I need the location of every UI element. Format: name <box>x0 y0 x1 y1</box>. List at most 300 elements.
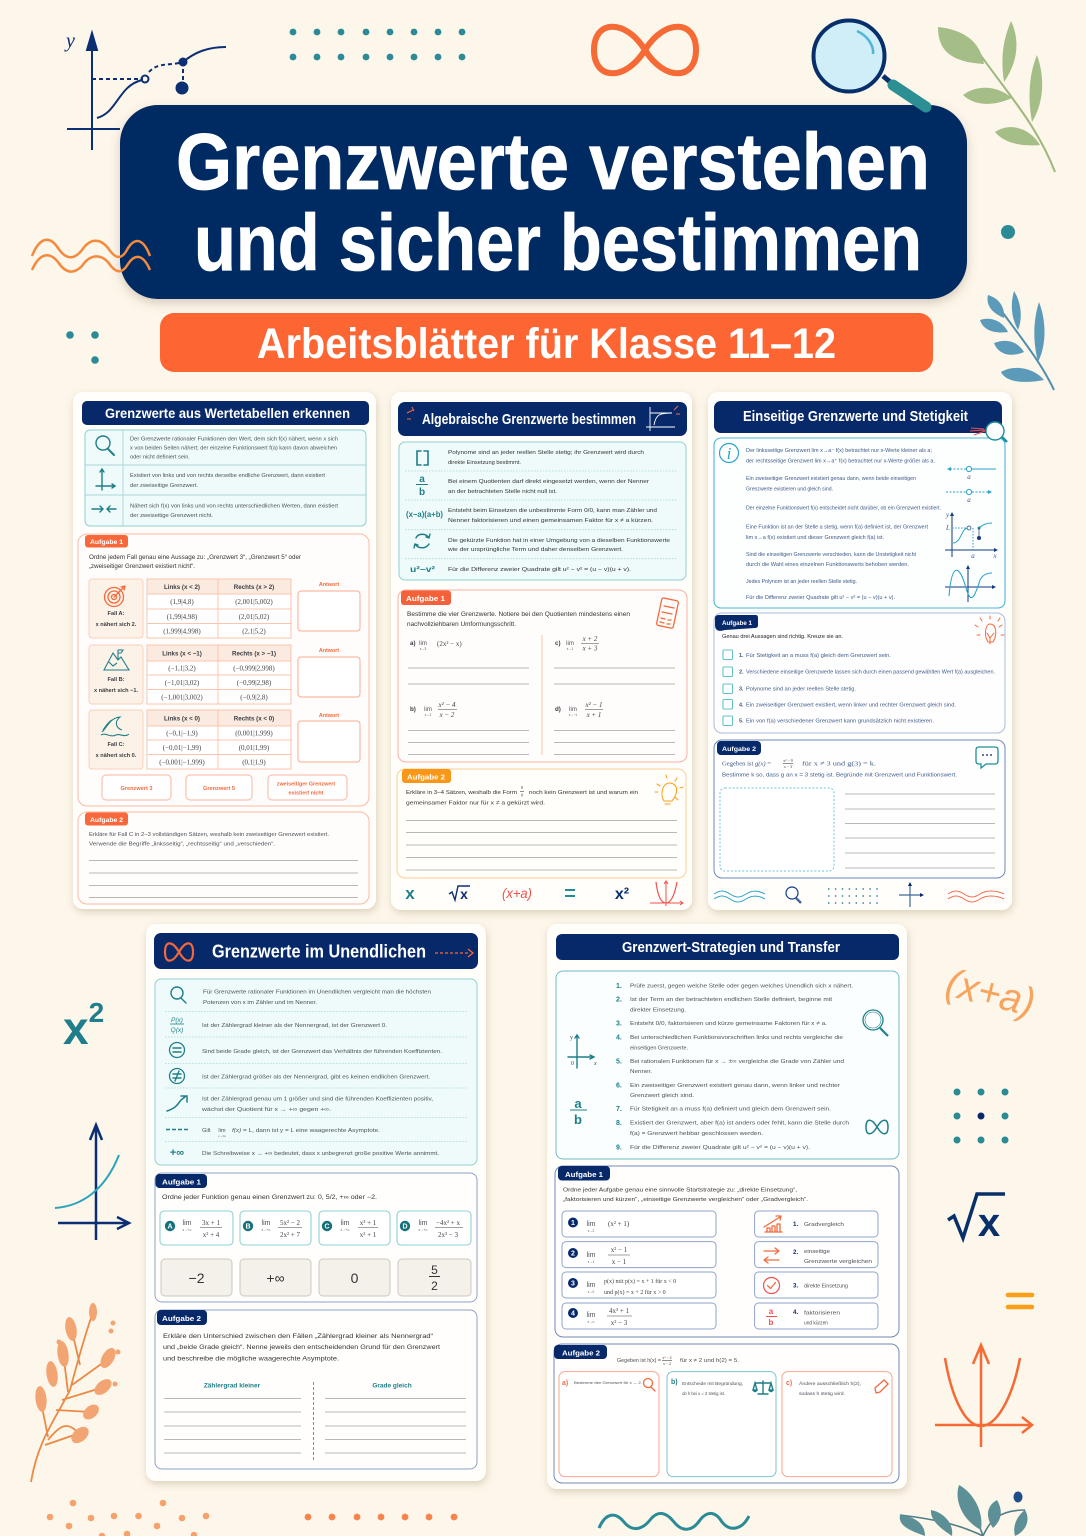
worksheet 5 heading <box>556 934 899 960</box>
function A: A <box>167 1224 173 1230</box>
worksheet 2 info box: Entsteht beim Einsetzen die unbestimmte Form 0/0, kann man Zähler und <box>448 508 657 514</box>
worksheet 1 Aufgabe 2: Verwende die Begriffe „linksseitig“, „rechtsseitig“ und „verschieden“. <box>89 842 275 848</box>
worksheet 4 heading <box>154 933 478 969</box>
case A <box>89 579 143 638</box>
item 4: 4 <box>571 1310 575 1318</box>
function D: D <box>402 1224 408 1230</box>
worksheet 3 Aufgabe 2: Gegeben ist g(x) = <box>722 760 771 768</box>
case C: Fall C: <box>107 742 125 748</box>
strategy: direkte Einsetzung: direkte Einsetzung <box>804 1284 848 1290</box>
checkbox list: 1. <box>739 653 744 659</box>
worksheet 4 info box: Ist der Zählergrad kleiner als der Nennergrad, ist der Grenzwert 0. <box>202 1023 387 1029</box>
worksheet 1 info box: x von beiden Seiten nähert; der einzelne Funktionswert f(a) kann davon abweichen <box>130 446 337 452</box>
case B <box>89 645 143 704</box>
worksheet 3 Aufgabe 1: Aufgabe 1 <box>722 621 753 627</box>
worksheet 2 info box: direkte Einsetzung bestimmt. <box>448 460 521 466</box>
table B: Rechts (x > −1) <box>232 650 276 658</box>
worksheet 5 Aufgabe 2: x − 2 <box>663 1362 671 1366</box>
worksheet 5 heading: Grenzwert-Strategien und Transfer <box>622 940 840 956</box>
decoration: orange dot row <box>305 1514 457 1520</box>
icon: fraction: a <box>419 474 425 485</box>
worksheet 4 info box: Sind beide Grade gleich, ist der Grenzwert das Verhältnis der führenden Koeffizienten. <box>202 1049 442 1055</box>
worksheet 4: Grenzwerte im Unendlichen <box>146 924 486 1481</box>
function B: lim <box>262 1220 271 1227</box>
worksheet 5 strategy list: Existiert der Grenzwert, aber f(a) ist anders oder fehlt, kann die Stelle durch <box>630 1120 849 1126</box>
icon: axes <box>96 469 115 490</box>
worksheet 3 Aufgabe 2: x − 3 <box>784 764 792 769</box>
strategy: Gradvergleich: 1. <box>793 1221 798 1228</box>
item 4: 4x³ + 1 <box>609 1307 630 1315</box>
worksheet 1 Aufgabe 1: Ordne jedem Fall genau eine Aussage zu: „Grenzwert 3“, „Grenzwert 5“ oder <box>89 555 301 561</box>
function C <box>319 1211 390 1245</box>
worksheet 1 info box <box>85 430 366 526</box>
icon: arrows toward each other <box>92 506 116 512</box>
table A: (2,001|5,002) <box>235 598 273 606</box>
worksheet 1: Wertetabellen <box>73 392 376 909</box>
worksheet 3 info box: Der einzelne Funktionswert f(x) entscheidet nicht darüber, ob ein Grenzwert existiert. <box>746 506 941 512</box>
answer box B <box>298 648 360 697</box>
problem c: x + 3 <box>582 644 598 652</box>
worksheet 3 info box: Jedes Polynom ist an jeder reellen Stelle stetig. <box>746 579 857 585</box>
icon: magnifier <box>171 987 186 1003</box>
function A <box>160 1211 233 1245</box>
diagram: jump graph <box>945 511 998 560</box>
checkbox list: Für Stetigkeit an a muss f(a) gleich dem Grenzwert sein. <box>746 653 891 659</box>
strategy: faktorisieren: b <box>769 1318 774 1327</box>
worksheet 4 info box: Potenzen von x im Zähler und im Nenner. <box>203 1000 317 1006</box>
item 4: x→∞ <box>587 1320 595 1324</box>
answer: -2 <box>161 1259 232 1296</box>
worksheet 4 Aufgabe 1: Ordne jeder Funktion genau einen Grenzwert zu: 0, 5/2, +∞ oder −2. <box>162 1195 377 1201</box>
function B <box>240 1211 311 1245</box>
icon: fraction: b <box>574 1112 582 1127</box>
worksheet 4 info box: lim <box>218 1128 226 1134</box>
item 2 <box>562 1242 716 1268</box>
strategy: faktorisieren: 4. <box>793 1309 798 1316</box>
subtask b: ob h bei x = 2 stetig ist. <box>682 1391 725 1396</box>
icon: axes <box>568 1035 597 1068</box>
subtask b: Entscheide mit Begründung, <box>682 1381 743 1386</box>
worksheet 2 info box: Für die Differenz zweier Quadrate gilt u² − v² = (u − v)(u + v). <box>448 567 631 573</box>
table C: Links (x < 0) <box>164 716 200 722</box>
problem b: x² − 4 <box>438 701 456 709</box>
worksheet 5 strategy list: Nenner. <box>630 1069 652 1075</box>
subtask c <box>782 1372 892 1477</box>
table A: (2,1|5,2) <box>242 628 266 636</box>
worksheet 3 info box: durch die Wahl eines einzelnen Funktionswerts behoben werden. <box>746 562 909 568</box>
checkbox list: Ein zweiseitiger Grenzwert existiert, wenn linker und rechter Grenzwert gleich sind. <box>746 702 956 708</box>
worksheet 5 strategy list: Entsteht 0/0, faktorisieren und kürze gemeinsame Faktoren für x ≠ a. <box>630 1021 828 1027</box>
worksheet 5 strategy list: einseitigen Grenzwerte. <box>630 1046 688 1052</box>
worksheet 3: Einseitige Grenzwerte <box>708 392 1012 910</box>
strategy: einseitige Grenzwerte: 2. <box>793 1249 798 1256</box>
checkbox list: Ein von f(a) verschiedener Grenzwert kann grundsätzlich nicht existieren. <box>746 718 934 724</box>
icon: orange parabola <box>935 1345 1032 1447</box>
decoration: teal dot right of banner <box>1001 225 1015 239</box>
worksheet 5 strategy list: 8. <box>616 1120 622 1127</box>
worksheet 5 strategy list: Für Stetigkeit an a muss f(a) definiert und gleich dem Grenzwert sein. <box>630 1106 832 1112</box>
strategy: einseitige Grenzwerte: Grenzwerte vergleichen <box>804 1259 872 1265</box>
problem c: c) <box>555 640 561 647</box>
item 2: x − 1 <box>612 1258 627 1266</box>
icon: limit graph top left <box>64 30 226 150</box>
worksheet 4 Aufgabe 2: Grade gleich <box>372 1382 412 1390</box>
worksheet 3 info box: Grenzwerte existieren und gleich sind. <box>746 486 833 492</box>
item 3: x→0 <box>588 1290 594 1294</box>
worksheet 2 info box: Nenner faktorisieren und einen gemeinsamen Faktor für x ≠ a kürzen. <box>448 518 653 524</box>
item 2: lim <box>587 1252 596 1259</box>
icon: axes: y <box>570 1035 573 1041</box>
answer box A: Antwort <box>319 582 339 588</box>
diagram: left limit: a <box>967 473 971 481</box>
worksheet 5 Aufgabe 1: „faktorisieren und kürzen“, „einseitige Grenzwerte vergleichen“ oder „Gradvergleich“. <box>563 1197 809 1203</box>
item 3: 3 <box>571 1280 575 1288</box>
answer: 0 <box>319 1259 390 1296</box>
table C: (0,01|1,99) <box>239 744 270 752</box>
worksheet 5 Aufgabe 2: für x ≠ 2 und h(2) = 5. <box>680 1358 739 1364</box>
icon: fraction <box>416 474 428 498</box>
worksheet 2 Aufgabe 1 <box>398 590 687 762</box>
table C: Rechts (x < 0) <box>234 716 274 722</box>
function B: 2x² + 7 <box>280 1231 301 1239</box>
worksheet 3 Aufgabe 2 <box>714 740 1005 878</box>
decoration: orange waves <box>32 240 150 272</box>
item 1: x→2 <box>588 1229 594 1233</box>
answer: +inf <box>240 1259 311 1296</box>
case C: x nähert sich 0. <box>96 753 137 759</box>
problem b: x→2 <box>425 713 432 717</box>
worksheet 5 Aufgabe 2 <box>554 1344 899 1483</box>
problem a: lim <box>419 641 427 647</box>
function C: x³ + 1 <box>360 1219 377 1227</box>
icon: equal circle <box>170 1042 184 1058</box>
worksheet 2 Aufgabe 2: Aufgabe 2 <box>407 772 445 782</box>
function D: lim <box>419 1220 428 1227</box>
table A: Rechts (x > 2) <box>234 584 274 591</box>
worksheet 3 info box: lim x→a f(x) existiert und dieser Grenzwert gleich f(a) ist. <box>746 535 884 541</box>
icon: plus infinity: +∞ <box>170 1147 184 1159</box>
worksheet 5 strategy list: Bei rationalen Funktionen für x → ±∞ vergleiche die Grade von Zähler und <box>630 1059 844 1065</box>
worksheet 4 info box: Für Grenzwerte rationaler Funktionen im Unendlichen vergleicht man die höchsten <box>203 990 431 996</box>
problem d: x→−1 <box>569 713 577 717</box>
worksheet 4 info box: x→±∞ <box>218 1134 226 1138</box>
icon: squares: u²−v² <box>410 565 435 574</box>
worksheet 5 strategy list: Ein zweiseitiger Grenzwert existiert genau dann, wenn linker und rechter <box>630 1083 840 1089</box>
worksheet 2 math footer: x <box>405 884 415 903</box>
worksheet 2 info box: Die gekürzte Funktion hat in einer Umgebung von a dieselben Funktionswerte <box>448 538 670 544</box>
worksheet 1 Aufgabe 2: Aufgabe 2 <box>90 817 123 824</box>
item 2: x→1 <box>588 1260 594 1264</box>
problem c: lim <box>566 641 574 647</box>
function C: x² + 1 <box>360 1231 377 1239</box>
worksheet 4 Aufgabe 1 <box>155 1173 477 1302</box>
worksheet 2 Aufgabe 2: noch kein Grenzwert ist und warum ein <box>529 790 638 796</box>
icon: axes: x <box>593 1061 597 1067</box>
problem c: x + 2 <box>582 635 598 643</box>
icon: P over Q <box>170 1017 184 1034</box>
worksheet 2 info box: an der betrachteten Stelle nicht null ist. <box>448 489 557 495</box>
case A: x nähert sich 2. <box>96 622 137 628</box>
checkbox list: Polynome sind an jeder reellen Stelle stetig. <box>746 686 856 692</box>
worksheet 1 info box: Existiert von links und von rechts derselbe endliche Grenzwert, dann existiert <box>130 473 325 479</box>
item 1: 1 <box>571 1220 575 1227</box>
option: Grenzwert 5 <box>186 775 252 800</box>
option: kein Grenzwert: existiert nicht <box>288 790 324 796</box>
problem b: b) <box>410 706 416 713</box>
item 1: lim <box>587 1221 596 1228</box>
checkbox list <box>723 650 995 726</box>
function A: lim <box>183 1220 192 1227</box>
worksheet 4 Aufgabe 1: Aufgabe 1 <box>162 1178 201 1186</box>
answer box C <box>298 713 360 762</box>
icon: speech bubble <box>976 747 998 768</box>
item 2: x² − 1 <box>611 1246 628 1254</box>
strategy: faktorisieren <box>755 1303 878 1329</box>
icon: P over Q: Q(x) <box>171 1027 183 1034</box>
worksheet 4 Aufgabe 2: Erkläre den Unterschied zwischen den Fällen „Zählergrad kleiner als Nennergrad“ <box>163 1334 433 1340</box>
option: kein Grenzwert: zweiseitiger Grenzwert <box>277 782 335 788</box>
answer: 0: 0 <box>351 1270 359 1286</box>
case A: Fall A: <box>108 611 125 617</box>
worksheet 1 Aufgabe 2 <box>78 812 369 904</box>
diagram: jump graph: L <box>945 524 950 532</box>
table A: (2,01|5,02) <box>239 613 270 621</box>
table C: (0,1|1,9) <box>242 758 266 766</box>
worksheet 5: Strategien und Transfer <box>547 924 907 1489</box>
icon: limit graph top left: y <box>64 30 75 52</box>
strategy: faktorisieren: und kürzen <box>804 1320 828 1326</box>
worksheet 2 Aufgabe 2: Erkläre in 3–4 Sätzen, weshalb die Form <box>406 790 517 796</box>
worksheet 5 strategy list: 6. <box>616 1082 622 1090</box>
worksheet 4 info box: wächst der Quotient für x → +∞ gegen +∞. <box>201 1107 332 1113</box>
worksheet 1 info box: Der Grenzwerte rationaler Funktionen den Wert, dem sich f(x) nähert, wenn x sich <box>130 436 338 442</box>
worksheet 5 strategy list: Bei unterschiedlichen Funktionsvorschriften links und rechts vergleiche die <box>630 1035 843 1041</box>
item 3: p(x) mit p(x) = x + 1 für x < 0 <box>604 1278 676 1285</box>
problem a: (2x² − x) <box>437 640 462 648</box>
worksheet 4 info box: Gilt <box>202 1128 211 1134</box>
worksheet 1 Aufgabe 1: „zweiseitiger Grenzwert existiert nicht“. <box>89 564 195 570</box>
math symbol: square root x <box>948 1194 1005 1245</box>
diagram: jump graph: x <box>992 552 997 560</box>
worksheet 4 info box: f(x) = L, dann ist y = L eine waagerechte Asymptote. <box>232 1128 380 1134</box>
case B: x nähert sich −1. <box>94 688 138 694</box>
icon: cycle arrows <box>414 534 430 548</box>
decoration: nine dots right <box>954 1088 1008 1144</box>
checkbox list: 4. <box>739 702 744 708</box>
decoration: orange scattered dots <box>47 1500 209 1536</box>
tab: Aufgabe 1 <box>90 539 123 546</box>
worksheet 5 strategy list <box>556 971 899 1159</box>
strategy: Gradvergleich: Gradvergleich <box>804 1222 844 1228</box>
worksheet 3 info box: Für die Differenz zweier Quadrate gilt u² − v² = (u − v)(u + v). <box>746 595 895 601</box>
title banner <box>120 105 967 299</box>
icon: blue branch <box>980 291 1054 390</box>
worksheet 3 info box: Ein zweiseitiger Grenzwert existiert genau dann, wenn beide einseitigen <box>746 476 916 482</box>
function C: lim <box>341 1220 350 1227</box>
math symbol: (x+a): (x+a) <box>941 961 1039 1025</box>
table B: (−1,001|3,002) <box>161 694 203 702</box>
decoration: three dots left <box>66 331 99 364</box>
table C: (−0,01|−1,99) <box>163 744 202 752</box>
worksheet 5 strategy list: Prüfe zuerst, gegen welche Stelle oder gegen welches Unendlich sich x nähert. <box>630 984 853 990</box>
worksheet 1 Aufgabe 2: Erkläre für Fall C in 2–3 vollständigen Sätzen, weshalb kein zweiseitiger Grenzwert existiert. <box>89 832 329 838</box>
icon: P over Q: P(x) <box>171 1017 183 1024</box>
worksheet 2 info box: wie der ursprüngliche Term und daher denselben Grenzwert. <box>447 547 623 553</box>
worksheet 5 Aufgabe 2: Gegeben ist h(x) = <box>617 1358 661 1364</box>
table A: (1,999|4,998) <box>163 628 201 636</box>
worksheet 3 heading: Einseitige Grenzwerte und Stetigkeit <box>743 408 968 425</box>
worksheet 4 Aufgabe 2: und „beide Grade gleich“. Nenne jeweils den entscheidenden Grund für den Grenzwert <box>163 1345 440 1351</box>
worksheet 5 strategy list: 3. <box>616 1020 622 1028</box>
option: kein Grenzwert <box>268 775 347 800</box>
worksheet 2 Aufgabe 1: Aufgabe 1 <box>406 594 445 603</box>
worksheet 3 info box: Sind die einseitigen Grenzwerte verschieden, kann die Unstetigkeit nicht <box>746 552 916 558</box>
icon: magnifying glass <box>814 20 926 107</box>
worksheet 3 Aufgabe 2: Aufgabe 2 <box>722 746 756 753</box>
worksheet 1 Aufgabe 1 <box>78 534 369 806</box>
subtitle bar <box>160 313 933 372</box>
icon: magnifier <box>863 1010 888 1036</box>
worksheet 5 strategy list: Grenzwert gleich sind. <box>630 1093 695 1099</box>
worksheet 4 info box: Die Schreibweise x → +∞ bedeutet, dass x unbegrenzt große positive Werte annimmt. <box>202 1151 439 1157</box>
item 1: (x² + 1) <box>608 1220 630 1228</box>
table A: (1,99|4,98) <box>167 613 198 621</box>
math symbol: square root x: x <box>978 1201 1000 1245</box>
worksheet 2 Aufgabe 2: 0 <box>521 785 524 790</box>
diagram: right limit: a <box>967 496 971 504</box>
strategy: faktorisieren: faktorisieren <box>804 1310 840 1316</box>
icon: fraction: b <box>419 487 425 498</box>
decoration: teal wave bottom <box>599 1513 749 1529</box>
table C: (−0,1|−1,9) <box>166 730 198 738</box>
option: Grenzwert 3 <box>102 775 171 800</box>
icon: teal leaves bottom right <box>900 1485 1028 1536</box>
title line 2: und sicher bestimmen <box>194 198 922 287</box>
answer box B: Antwort <box>319 648 339 654</box>
worksheet 2: Algebraische Grenzwerte <box>391 392 692 910</box>
worksheet 1 info box: Nähert sich f(x) von links und von rechts unterschiedlichen Werten, dann existiert <box>130 504 338 510</box>
answer: -2: −2 <box>189 1270 205 1286</box>
answer box C: Antwort <box>319 713 339 719</box>
problem d: d) <box>555 706 561 713</box>
worksheet 2 Aufgabe 2 <box>397 769 686 878</box>
worksheet 3 info box <box>714 422 1007 608</box>
strategy: einseitige Grenzwerte: einseitige <box>804 1249 830 1255</box>
option: Grenzwert 5: Grenzwert 5 <box>203 786 235 792</box>
worksheet 4 Aufgabe 2: Zählergrad kleiner <box>204 1382 261 1390</box>
table C: (0,001|1,999) <box>235 730 273 738</box>
worksheet 4 info box: Ist der Zählergrad genau um 1 größer und sind die führenden Koeffizienten positiv, <box>202 1096 433 1102</box>
item 3: und p(x) = x + 2 für x > 0 <box>604 1289 666 1296</box>
icon: dashed line <box>166 1128 188 1130</box>
diagram: left limit <box>947 466 996 481</box>
diagram: jump graph: a <box>971 552 975 560</box>
answer box A <box>298 582 360 631</box>
answer: +inf: +∞ <box>266 1270 285 1286</box>
subtask a: a) <box>562 1380 568 1387</box>
worksheet 1 info box: oder nicht definiert sein. <box>130 454 190 460</box>
checkbox list: 3. <box>739 686 744 692</box>
worksheet 5 strategy list: 7. <box>616 1106 622 1113</box>
table A: (1,9|4,8) <box>170 598 194 606</box>
problem a: a) <box>410 640 416 647</box>
tab <box>85 535 128 548</box>
function B: x→+∞ <box>262 1228 271 1232</box>
worksheet 3 Aufgabe 1 <box>714 613 1005 733</box>
problem c <box>555 635 599 652</box>
icon: brackets <box>417 451 428 465</box>
worksheet 5 Aufgabe 1 <box>555 1166 899 1337</box>
item 1 <box>562 1211 716 1237</box>
worksheet 3 info box: Eine Funktion ist an der Stelle a stetig, wenn f(a) definiert ist, der Grenzwert <box>746 524 928 530</box>
icon: magnifier in header <box>970 422 1007 442</box>
worksheet 3 footer icons <box>714 882 1004 907</box>
item 3 <box>562 1272 716 1298</box>
problem d: x + 1 <box>586 711 601 719</box>
table B: (−0,9|2,8) <box>240 694 268 702</box>
problem a <box>410 640 462 651</box>
icon: factored form: (x−a)(a+b) <box>406 510 443 519</box>
decoration: teal dot rows <box>290 29 465 60</box>
table B: (−0,999|2,998) <box>233 664 275 672</box>
problem b: lim <box>424 707 432 713</box>
math symbol: x squared: x <box>63 1002 89 1054</box>
table B: (−1,1|3,2) <box>168 664 196 672</box>
subtask b <box>667 1372 776 1477</box>
worksheet 4 info box: Ist der Zählergrad größer als der Nennergrad, gibt es keinen endlichen Grenzwert. <box>202 1074 430 1080</box>
worksheet 1 info box: der zweiseitige Grenzwert nicht. <box>130 513 213 519</box>
problem d: lim <box>569 707 577 713</box>
diagram: jump graph: y <box>945 511 950 519</box>
function D: −4x² + x <box>436 1219 460 1227</box>
subtask a: Bestimme den Grenzwert für x → 2. <box>574 1381 642 1385</box>
strategy: direkte Einsetzung: 3. <box>793 1282 798 1290</box>
worksheet 3 info box: Der linksseitige Grenzwert lim x→a⁻ f(x) betrachtet nur x-Werte kleiner als a; <box>746 448 932 454</box>
worksheet 5 Aufgabe 1: Aufgabe 1 <box>565 1170 603 1179</box>
worksheet 2 math footer <box>405 881 683 906</box>
math symbol: x squared: 2 <box>89 997 104 1028</box>
subtitle bar: Arbeitsblätter für Klasse 11–12 <box>257 320 836 368</box>
worksheet 2 heading: Algebraische Grenzwerte bestimmen <box>422 411 636 428</box>
worksheet 2 math footer: x² <box>615 886 629 903</box>
option: Grenzwert 3: Grenzwert 3 <box>120 786 153 792</box>
table B: Links (x < −1) <box>162 650 202 658</box>
math symbol: equals <box>1008 1295 1032 1307</box>
worksheet 5 strategy list: 2. <box>616 996 622 1004</box>
icon: fraction: a <box>574 1096 582 1111</box>
worksheet 5 strategy list: Für die Differenz zweier Quadrate gilt u² − v² = (u − v)(u + v). <box>630 1145 811 1151</box>
worksheet 5 strategy list: direkter Einsetzung. <box>630 1008 687 1014</box>
answer: 5/2: 5 <box>431 1263 438 1277</box>
diagram: right limit <box>946 489 992 504</box>
icon: green branch <box>938 21 1055 172</box>
worksheet 4 info box <box>155 979 477 1165</box>
worksheet 5 strategy list: f(a) = Grenzwert hebbar geschlossen werden. <box>630 1131 764 1137</box>
icon: rising arrow <box>167 1096 187 1111</box>
function D: x→+∞ <box>419 1228 428 1232</box>
function A: 3x + 1 <box>202 1219 220 1227</box>
item 4: lim <box>587 1312 596 1319</box>
worksheet 3 Aufgabe 2: Bestimme k so, dass g an x = 3 stetig ist. Begründe mit Grenzwert und Funktionswert. <box>722 772 958 778</box>
worksheet 1 heading: Grenzwerte aus Wertetabellen erkennen <box>105 405 350 421</box>
checkbox list: 2. <box>739 670 744 676</box>
worksheet 4 Aufgabe 2: Aufgabe 2 <box>162 1314 201 1323</box>
function D: 2x³ − 3 <box>438 1231 459 1239</box>
icon: axes: 0 <box>571 1061 574 1067</box>
table B: (−1,01|3,02) <box>165 679 200 687</box>
strategy: einseitige Grenzwerte <box>755 1242 878 1268</box>
icon: calculator <box>656 598 679 629</box>
